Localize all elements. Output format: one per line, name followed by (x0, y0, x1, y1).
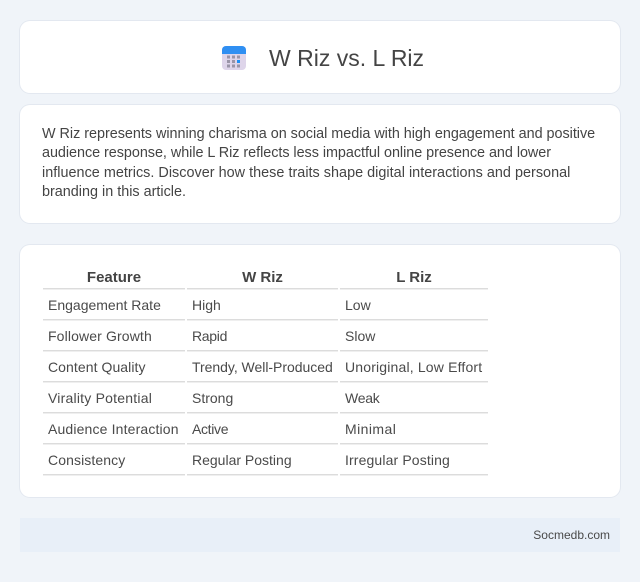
row: follower growth: Follower Growth (48, 328, 152, 344)
table header: L Riz (396, 269, 432, 286)
row: virality potential: Weak (345, 390, 380, 406)
footer source text: Socmedb.com (533, 528, 610, 542)
icon: calendar (222, 46, 246, 70)
row: content quality (48, 359, 482, 375)
panel: title card (20, 21, 620, 93)
panel: comparison table (20, 245, 620, 497)
row: consistency: Consistency (48, 452, 125, 468)
intro paragraph: branding in this article. (42, 184, 186, 200)
row: engagement rate (48, 297, 371, 313)
row: content quality: Unoriginal, Low Effort (345, 359, 482, 375)
row: consistency (48, 452, 450, 468)
row: content quality: Content Quality (48, 359, 146, 375)
panel: intro text (20, 105, 620, 223)
row: consistency: Regular Posting (192, 452, 292, 468)
row: follower growth (48, 328, 376, 344)
table header (87, 269, 432, 286)
row: virality potential: Strong (192, 390, 233, 406)
intro paragraph (42, 126, 595, 200)
title: W Riz vs. L Riz (269, 45, 424, 71)
footer bar (20, 518, 620, 552)
row: engagement rate: Engagement Rate (48, 297, 161, 313)
row: audience interaction: Active (192, 421, 228, 437)
table header: W Riz (242, 269, 283, 286)
row: engagement rate: High (192, 297, 221, 313)
row: engagement rate: Low (345, 297, 371, 313)
row: audience interaction: Audience Interaction (48, 421, 179, 437)
table header: Feature (87, 269, 141, 286)
row: follower growth: Rapid (192, 328, 227, 344)
intro paragraph: influence metrics. Discover how these traits shape digital interactions and personal (42, 165, 570, 181)
row dividers (43, 288, 488, 476)
row: consistency: Irregular Posting (345, 452, 450, 468)
intro paragraph: W Riz represents winning charisma on social media with high engagement and positive (42, 126, 595, 142)
row: content quality: Trendy, Well-Produced (192, 359, 333, 375)
row: virality potential: Virality Potential (48, 390, 152, 406)
intro paragraph: audience response, while L Riz reflects less impactful online presence and lower (42, 145, 551, 161)
row: follower growth: Slow (345, 328, 375, 344)
row: audience interaction (48, 421, 396, 437)
row: audience interaction: Minimal (345, 421, 396, 437)
row: virality potential (48, 390, 380, 406)
